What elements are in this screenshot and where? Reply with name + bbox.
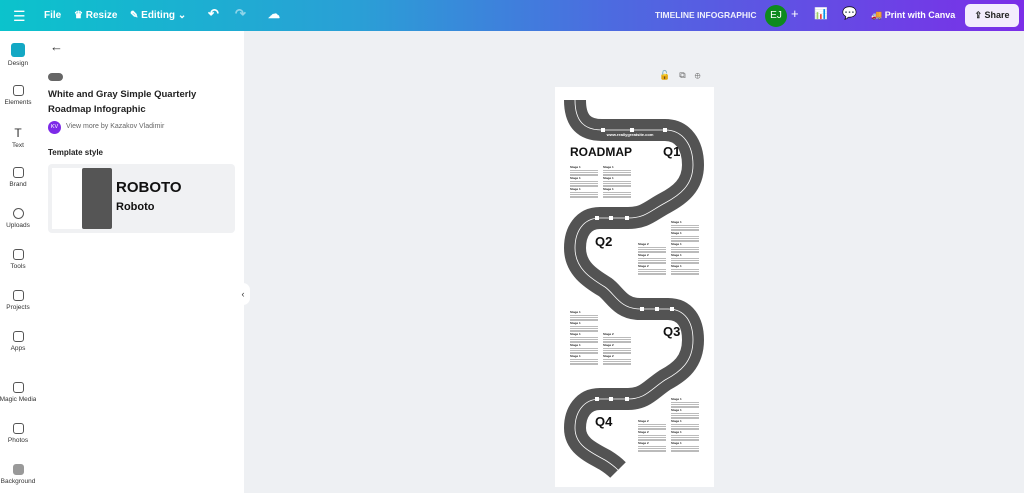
top bar: ☁: [268, 7, 280, 21]
side panel: ←: [50, 39, 63, 54]
template style card: [48, 164, 235, 233]
stage text blocks: Stage 1: [671, 220, 682, 224]
stage text blocks: Stage 1: [570, 176, 581, 180]
stage text blocks: Stage 2: [603, 343, 614, 347]
side panel: [36, 31, 244, 493]
stage text blocks: Stage 1: [603, 165, 614, 169]
stage text blocks: Stage 1: [603, 176, 614, 180]
road: www.reallygreatsite.com: [606, 132, 654, 137]
top bar: ✎ Editing ⌄: [130, 10, 186, 21]
left nav: Apps: [11, 345, 25, 352]
stage text blocks: Stage 1: [671, 231, 682, 235]
side panel: KV: [51, 124, 58, 130]
left nav: Magic Media: [0, 396, 36, 403]
stage text blocks: Stage 2: [603, 332, 614, 336]
top bar: File: [44, 10, 61, 21]
Q labels: Q1: [663, 144, 680, 159]
stage text blocks: Stage 1: [570, 343, 581, 347]
top bar: 💬: [842, 6, 857, 20]
top bar: ↶: [208, 6, 219, 21]
stage text blocks: Stage 1: [671, 397, 682, 401]
left nav: Projects: [6, 304, 30, 311]
page toolbar icons: 🔓⧉⊕: [659, 70, 710, 80]
document title: TIMELINE INFOGRAPHIC: [655, 10, 757, 20]
left nav: Brand: [9, 181, 27, 188]
stage text blocks: Stage 2: [638, 242, 649, 246]
left nav: Uploads: [6, 222, 30, 229]
stage text blocks: Stage 1: [570, 354, 581, 358]
stage text blocks: Stage 1: [570, 321, 581, 325]
print button: 🚚 Print with Canva: [871, 10, 955, 20]
poster: Q3: [663, 324, 680, 339]
left nav: Design: [8, 60, 28, 67]
stage text blocks: Stage 1: [671, 264, 682, 268]
share button: ⇪ Share: [974, 10, 1010, 20]
stage text blocks: Stage 1: [671, 430, 682, 434]
avatar: [765, 5, 787, 27]
left nav: Background: [1, 478, 35, 485]
top bar: ↷: [235, 6, 246, 21]
poster: Q4: [595, 414, 612, 429]
stage text blocks: Stage 1: [671, 253, 682, 257]
stage text blocks: Stage 2: [603, 354, 614, 358]
left nav: [0, 31, 36, 493]
stage text blocks: Stage 2: [638, 264, 649, 268]
stage text blocks: Stage 1: [671, 408, 682, 412]
stage text blocks: Stage 1: [570, 187, 581, 191]
stage text blocks: Stage 2: [638, 441, 649, 445]
collapse button: ‹: [242, 289, 244, 299]
title ROADMAP: ROADMAP: [570, 145, 632, 159]
side panel: Template style: [48, 148, 103, 157]
stage text blocks: Stage 1: [603, 187, 614, 191]
left nav: T: [14, 126, 22, 140]
top bar: +: [791, 6, 799, 21]
left nav: Photos: [8, 437, 28, 444]
stage text blocks: Stage 2: [638, 253, 649, 257]
stage text blocks: Stage 1: [671, 419, 682, 423]
top bar: 📊: [814, 8, 828, 20]
left nav: Tools: [10, 263, 26, 270]
stage text blocks: [570, 165, 699, 452]
collapse button: [236, 283, 250, 305]
stage text blocks: Stage 2: [638, 419, 649, 423]
stage text blocks: Stage 1: [570, 165, 581, 169]
template style card: ROBOTO: [116, 179, 182, 196]
left nav: Elements: [4, 99, 32, 106]
left nav: Text: [12, 142, 24, 149]
template title: White and Gray Simple Quarterly Roadmap Infographic: [48, 89, 196, 115]
stage text blocks: Stage 1: [671, 441, 682, 445]
road: [575, 100, 693, 470]
menu icon: ☰: [13, 8, 26, 24]
stage text blocks: Stage 2: [638, 430, 649, 434]
stage text blocks: Stage 1: [671, 242, 682, 246]
avatar: EJ: [770, 10, 782, 21]
stage text blocks: Stage 1: [570, 332, 581, 336]
template style card: Roboto: [116, 201, 154, 213]
side panel: View more by Kazakov Vladimir: [66, 123, 164, 130]
top bar: ♛ Resize: [74, 10, 117, 21]
poster: [555, 87, 714, 487]
stage text blocks: Stage 1: [570, 310, 581, 314]
share button: [965, 4, 1019, 27]
poster: Q2: [595, 234, 612, 249]
top bar: [0, 0, 1024, 31]
